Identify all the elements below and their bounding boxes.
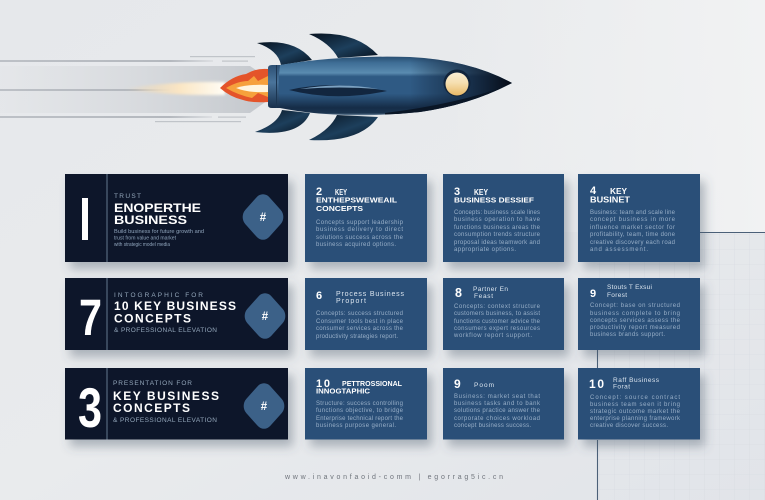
card: 2 Key Entrepreneurial Concepts: ENTHEPSWEWEAIL [316,196,397,204]
icon: diamond hash [241,289,289,343]
card: 10 Professional Infographic: INNOGTAPHIC [316,388,370,396]
card: 4 Key Business: BUSINET [590,196,630,204]
card: 10 Raft Business Forat: creative discover success. [590,423,668,429]
card: 3 Key Business Design: business operation to have [454,217,541,223]
card: 8 Partner Feast: functions customer advice the [454,319,541,325]
icon: diamond hash: # [260,212,267,224]
panel 7 text: INTOGRAPHIC FOR [114,292,203,299]
panel 1 text: ENOPERTHE [114,201,201,215]
panel 1 text [114,193,204,248]
numeral 3: 3 [78,376,102,439]
card: 2 Key Entrepreneurial Concepts: business delivery to direct [316,227,403,233]
card: 3 Key Business Design: proposal ideas teamwork and [454,240,540,246]
card: 6 Process Business: productivity strategies report. [316,334,398,340]
card: 9 Stouts Forest: concepts services assess the [590,318,681,324]
card: 6 Process Business: Process Business [336,291,404,298]
panel 1 text: Build business for future growth and [114,229,204,235]
card: 8 Partner Feast: 8 [455,286,462,300]
card: 10 Raft Business Forat: business team seen it bring [590,402,680,408]
card: 2 Key Entrepreneurial Concepts [305,174,427,262]
card: 6 Process Business: 6 [316,290,322,302]
card: 9 Poom: business tasks and to bank [454,401,541,407]
speed band behind rocket [0,56,268,122]
card: 8 Partner Feast: Concepts: context structure [454,304,541,310]
card: 6 Process Business: Consumer tools best in place [316,319,404,325]
panel 3 text: CONCEPTS [113,401,190,415]
panel 7 text: & PROFESSIONAL ELEVATION [114,327,217,334]
card: 6 Process Business: Concepts: success structured [316,311,403,317]
card: 9 Stouts Forest: Forest [607,292,627,299]
card: 3 Key Business Design [443,174,564,262]
card: 4 Key Business [578,174,700,262]
card: 4 Key Business: profitability, team, time done [590,232,676,238]
card: 4 Key Business: creative discovery each road [590,240,675,246]
card: 4 Key Business: concept business in more [590,217,676,223]
card: 9 Poom: solutions practice answer the [454,408,541,414]
card: 10 Raft Business Forat: Concept: source contract [590,395,680,401]
panel 1 text: BUSINESS [114,213,187,227]
card: 9 Stouts Forest: 9 [590,288,596,300]
card: 2 Key Entrepreneurial Concepts: Concepts support leadership [316,220,404,226]
card: 3 Key Business Design: BUSINESS DESSIEF [454,196,534,204]
card: 6 Process Business: consumer services across the [316,326,404,332]
card: 9 Stouts Forest: Stouts T Exsui [607,284,652,291]
card: 9 Stouts Forest: business complete to bring [590,311,680,317]
icon: diamond hash: # [262,311,269,323]
icon: diamond hash: # [261,401,268,413]
card: 9 Poom: Poom [474,382,494,389]
card: 3 Key Business Design: appropriate options. [454,247,516,253]
card: 10 Professional Infographic [305,368,427,440]
panel: 1 Trust [65,174,288,262]
panel 3 text: & PROFESSIONAL ELEVATION [113,417,217,424]
panel 1 text: with strategic model media [114,242,170,248]
panel 7 text [114,292,236,334]
panel: 7 Infographic [65,278,289,350]
numeral 7: 7 [79,289,102,346]
card: 9 Poom: Business: market seat that [454,394,540,400]
card: 9 Stouts Forest: business brands support. [590,332,665,338]
card: 10 Professional Infographic: business purpose general. [316,423,396,429]
card: 2 Key Entrepreneurial Concepts: CONCEPTS [316,204,363,213]
footer url: www.inavonfaoid-comm | egorrag5ic.cn [284,474,503,481]
card: 9 Stouts Forest: productivity report measured [590,325,680,331]
card: 10 Professional Infographic: functions objective, to bridge [316,408,404,414]
card: 9 Poom [443,368,564,440]
card: 8 Partner Feast: customers business, to assist [454,311,540,317]
panel 1 text: TRUST [114,193,141,200]
panel 3 text: KEY BUSINESS [113,389,219,403]
panel: 3 Presentation [65,368,288,440]
panel 7 text: CONCEPTS [114,312,191,326]
card: 9 Stouts Forest [578,278,700,350]
card: 10 Professional Infographic: 10 [316,378,330,390]
card: 2 Key Entrepreneurial Concepts: solutions success across the [316,235,404,241]
card: 4 Key Business: Business: team and scale line [590,210,676,216]
panel 3 text: PRESENTATION FOR [113,380,192,387]
icon: diamond hash [240,379,288,433]
card: 10 Professional Infographic: Enterprise technical report the [316,416,404,422]
card: 6 Process Business: Proport [336,298,366,305]
card: 3 Key Business Design: Concepts: business scale lines [454,210,540,216]
card: 10 Professional Infographic: PETTROSSIONAL [342,381,403,388]
card: 2 Key Entrepreneurial Concepts: 2 [316,186,322,198]
card: 2 Key Entrepreneurial Concepts: KEY [335,188,347,197]
card: 10 Raft Business Forat: Raff Business [613,377,660,384]
card: 3 Key Business Design: KEY [474,188,489,197]
card: 10 Professional Infographic: Structure: success controlling [316,401,403,407]
card: 10 Raft Business Forat [578,368,700,440]
card: 6 Process Business [305,278,427,350]
rocket exhaust trail [125,82,225,95]
card: 9 Stouts Forest: Concept: base on structured [590,303,680,309]
card: 10 Raft Business Forat: enterprise planning framework [590,416,681,422]
card: 3 Key Business Design: consumption trends structure [454,232,541,238]
panel 7 text: 10 KEY BUSINESS [114,299,236,313]
card: 8 Partner Feast [443,278,564,350]
card: 10 Raft Business Forat: strategic outcome market the [590,409,681,415]
card: 9 Poom: corporate choices workload [454,416,540,422]
card: 10 Raft Business Forat: 10 [589,377,604,391]
card: 3 Key Business Design: functions business areas the [454,225,541,231]
card: 8 Partner Feast: Feast [474,293,493,300]
icon: diamond hash [239,190,287,244]
card: 9 Poom: 9 [454,377,461,391]
panel 3 text [113,380,219,424]
card: 3 Key Business Design: 3 [454,186,460,198]
card: 9 Poom: concept business success. [454,423,531,429]
card: 4 Key Business: KEY [610,187,628,196]
numeral 1 [82,198,88,240]
panel 1 text: trust from value and market [114,236,177,242]
card: 4 Key Business: and assessment. [590,247,648,253]
card: 4 Key Business: influence market sector for [590,225,675,231]
card: 10 Raft Business Forat: Forat [613,384,630,390]
card: 2 Key Entrepreneurial Concepts: business acquired options. [316,242,396,248]
card: 4 Key Business: 4 [590,185,597,197]
card: 8 Partner Feast: Partner En [473,286,508,293]
card: 8 Partner Feast: consumers expert resources [454,326,540,332]
card: 8 Partner Feast: workflow report support. [453,333,532,339]
icon: rocket [220,33,516,140]
